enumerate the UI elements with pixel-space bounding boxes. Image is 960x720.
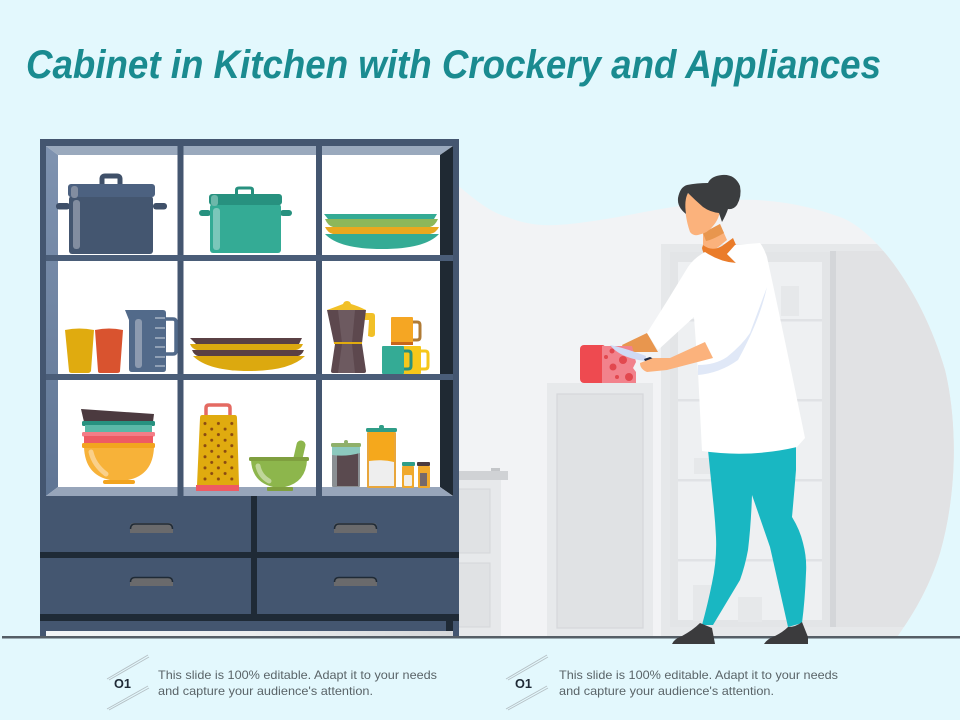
stacked bowls — [81, 409, 155, 484]
hair — [678, 175, 741, 222]
counter unit — [547, 383, 653, 637]
caption text 2: and capture your audience's attention. — [559, 684, 774, 698]
drawers — [40, 496, 459, 636]
box grater — [196, 405, 239, 491]
number badge 1: O1 — [114, 676, 131, 691]
background kitchen scene — [455, 183, 960, 637]
title: Cabinet in Kitchen with Crockery and Appliances — [26, 43, 881, 87]
caption text 2: This slide is 100% editable. Adapt it to your needs — [559, 668, 838, 682]
background blob — [455, 183, 954, 637]
fridge — [661, 244, 960, 637]
trousers — [702, 445, 806, 627]
food block — [580, 345, 636, 383]
white shirt — [647, 243, 805, 454]
caption text 1: and capture your audience's attention. — [158, 684, 373, 698]
back forearm — [622, 333, 658, 352]
small side cabinet — [455, 468, 508, 637]
floor line — [2, 636, 960, 638]
caption text 1: This slide is 100% editable. Adapt it to your needs — [158, 668, 437, 682]
cabinet — [40, 139, 459, 636]
mortar and pestle — [249, 445, 309, 491]
measuring jug — [125, 310, 176, 372]
collar — [702, 238, 736, 263]
cabinet frame — [40, 139, 459, 636]
shoes — [672, 623, 715, 644]
neck and face — [703, 224, 727, 252]
stacked plates top — [324, 214, 439, 249]
stacked plates middle — [190, 338, 305, 371]
cabinet interior — [46, 146, 453, 496]
green pot — [199, 188, 292, 253]
caption 1 — [107, 655, 440, 710]
number badge 1 — [107, 655, 149, 710]
front forearm and hand — [640, 342, 713, 372]
stacked mugs — [382, 317, 428, 374]
two cups — [65, 328, 123, 373]
shirt fold — [698, 287, 767, 375]
woman cutting food — [580, 175, 808, 644]
large navy pot — [56, 176, 167, 254]
glass jars — [331, 425, 430, 488]
knife — [610, 345, 656, 361]
moka pot — [327, 301, 375, 373]
caption 2 — [506, 655, 841, 710]
number badge 2: O1 — [515, 676, 532, 691]
number badge 2 — [506, 655, 548, 710]
